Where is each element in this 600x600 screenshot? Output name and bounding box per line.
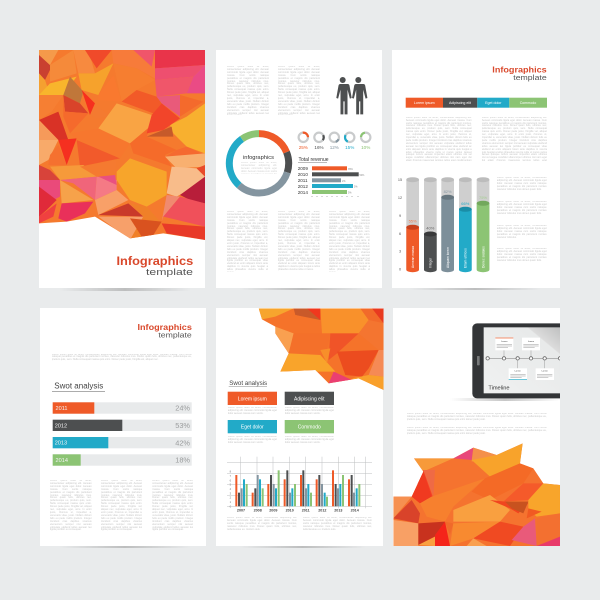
chart: grouped columns: 2014	[351, 509, 360, 513]
cover title: template	[146, 267, 193, 278]
chart: small percentage rings: 25%	[299, 145, 308, 150]
category buttons: Adipiscing elit	[294, 396, 325, 402]
chart: total revenue bars: 54%	[360, 174, 365, 177]
icon: two people	[336, 77, 367, 114]
category buttons: Commodo	[298, 425, 321, 431]
chart: cylinders: 9	[399, 214, 401, 218]
chart: grouped columns: 2	[230, 496, 232, 500]
chart: total revenue bars: 2011	[298, 178, 308, 183]
chart: total revenue bars: 2014	[298, 190, 308, 195]
chart: cylinders	[398, 177, 489, 272]
chart: grouped columns: 2009	[269, 509, 277, 513]
chart: small percentage rings: 15%	[345, 145, 354, 150]
cover title	[116, 256, 193, 278]
chart: swot progress bars: 2013	[55, 441, 67, 447]
low-poly cover artwork	[39, 50, 205, 240]
chart: small percentage rings: 16%	[314, 145, 324, 150]
chart: grouped columns: 5	[230, 483, 232, 487]
title: Infographics	[138, 323, 193, 332]
text: side notes	[497, 177, 547, 269]
chart: cylinders: 75%	[479, 195, 487, 200]
chart: grouped columns: 6	[230, 478, 232, 482]
tablet with timeline: Lorem	[501, 340, 508, 343]
chart: total revenue bars: 2012	[298, 184, 308, 189]
chart: cylinders: Aliquam lorem	[446, 247, 450, 268]
chart: total revenue bars: 2009	[298, 166, 308, 171]
chart: total revenue bars: Total revenue	[298, 157, 329, 163]
text: top columns	[227, 66, 320, 115]
text: button captions	[228, 407, 334, 445]
chart: swot progress bars: 18%	[175, 456, 190, 465]
panel: cover page	[39, 50, 205, 291]
chart: grouped columns	[227, 457, 372, 513]
chart: cylinders: 6	[399, 232, 401, 236]
heading: swot analysis: Swot analysis	[54, 382, 103, 391]
chart: swot progress bars	[53, 402, 192, 466]
segmented label bar: Eget dolor	[485, 101, 502, 105]
panel: timeline tablet page	[393, 308, 572, 547]
chart: swot progress bars: 53%	[175, 421, 190, 430]
chart: grouped columns: 1	[230, 500, 232, 504]
chart: cylinders: 0	[399, 268, 401, 272]
chart: total revenue bars	[298, 157, 365, 197]
title: template	[513, 73, 547, 82]
chart: cylinders: Donec sodales	[481, 246, 485, 268]
chart: grouped columns: 4	[230, 487, 232, 491]
chart: swot progress bars: 2012	[55, 423, 67, 429]
chart: grouped columns: 2007	[237, 509, 245, 513]
chart: total revenue bars: 2010	[298, 172, 308, 177]
chart: swot progress bars: 2011	[56, 406, 68, 412]
title	[138, 323, 193, 339]
title	[492, 65, 547, 82]
heading: swot analysis: Swot analysis	[229, 380, 267, 387]
chart: cylinders: Etiam ultrices	[464, 248, 468, 268]
chart: total revenue bars: 35%	[348, 168, 354, 171]
chart: small percentage rings: 12%	[330, 145, 339, 150]
chart: grouped columns: 3	[230, 491, 232, 495]
chart: cylinders: 55%	[409, 218, 417, 224]
chart: grouped columns: 2008	[254, 509, 262, 513]
chart: grouped columns: 2011	[302, 509, 310, 513]
title: Infographics	[492, 65, 547, 74]
text: bottom columns: Lorem ipsum dolor sit amet, consectetuer adipiscing elit. Aenean commodo ligula eget dolor. Aenean massa. Cum sociis natoque penatibus et magnis dis parturient montes, nascetur ridiculus mus. Donec quam felis, ultricies nec, pellentesque eu, pretium quis, sem. Nulla consequat massa quis enim. Donec pede justo, fringilla vel, aliquet nec, vulputate eget, arcu. In enim justo, rhoncus ut, imperdiet a, venenatis vitae, justo. Nullam dictum felis eu pede mollis pretium. Integer tincidunt cras dapibus vivamus elementum semper nisi aenean vulputate eleifend tellus aenean leo ligula porttitor eu consequat vitae eleifend ac enim aliquam lorem ante dapibus in viverra quis feugiat a tellus phasellus viverra nulla ut metus.	[278, 211, 320, 271]
chart: donut: infographics	[243, 155, 274, 161]
chart: grouped columns: 2010	[286, 509, 294, 513]
segmented label bar: Adipiscing elit	[449, 101, 471, 105]
low-poly corner artwork	[259, 308, 384, 390]
cover title: Infographics	[116, 256, 193, 268]
chart: grouped columns: 0	[230, 504, 232, 508]
chart: cylinders: 40%	[426, 226, 435, 230]
chart: total revenue bars: 5%	[354, 186, 358, 189]
chart: grouped columns: 2013	[334, 509, 342, 513]
segmented label bar: Commodo	[520, 101, 536, 105]
chart: grouped columns: 8	[230, 470, 232, 474]
text: intro columns	[406, 117, 547, 161]
chart: small percentage rings	[299, 131, 371, 150]
chart: cylinders: 15	[398, 178, 402, 182]
text: bottom columns	[227, 517, 372, 530]
text: columns: Lorem ipsum dolor sit amet, consectetuer adipiscing elit. Aenean commodo ligula eget dolor. Aenean massa. Cum sociis natoque penatibus et magnis dis parturient montes, nascetur ridiculus mus. Donec quam felis, ultricies nec, pellentesque eu, pretium quis, sem. Nulla consequat massa quis enim. Donec pede justo, fringilla vel, aliquet nec, vulputate eget, arcu. In enim justo, rhoncus ut, imperdiet a, venenatis vitae, justo. Nullam dictum felis eu pede mollis pretium. Integer tincidunt cras dapibus vivamus elementum semper nisi aenean vulputate eleifend tellus aenean leo ligula porttitor eu consequat.	[50, 480, 92, 531]
chart: cylinders: 82%	[444, 189, 452, 194]
title: template	[158, 330, 192, 339]
low-poly bottom artwork	[393, 443, 560, 547]
chart: small percentage rings: 10%	[361, 145, 370, 150]
chart: total revenue bars: 5%	[348, 192, 352, 195]
chart: cylinders: 3	[399, 250, 401, 254]
tablet with timeline: Lorem	[528, 340, 534, 343]
chart: swot progress bars: 24%	[175, 404, 190, 413]
chart: cylinders: 12	[398, 196, 402, 200]
segmented label bar: Lorem ipsum	[414, 101, 435, 105]
chart: donut	[229, 134, 289, 193]
tablet with timeline	[472, 323, 560, 398]
text: columns: Lorem ipsum dolor sit amet, consectetuer adipiscing elit. Aenean commodo ligula eget dolor. Aenean massa. Cum sociis natoque penatibus et magnis dis parturient montes, nascetur ridiculus mus. Donec quam felis, ultricies nec, pellentesque eu, pretium quis, sem. Nulla consequat massa quis enim. Donec pede justo, fringilla vel, aliquet nec, vulputate eget, arcu. In enim justo, rhoncus ut, imperdiet a, venenatis vitae, justo. Nullam dictum felis eu pede mollis pretium. Integer tincidunt cras dapibus vivamus elementum semper nisi aenean vulputate eleifend tellus aenean leo ligula porttitor eu consequat.	[152, 480, 193, 531]
category buttons: Eget dolor	[241, 425, 264, 431]
category buttons	[228, 392, 334, 433]
text: intro paragraphs	[407, 413, 547, 437]
segmented label bar	[406, 98, 547, 108]
tablet with timeline: Lorem	[542, 370, 548, 373]
text: bottom columns	[227, 211, 370, 272]
chart: grouped columns: 2012	[318, 509, 326, 513]
text: columns: Lorem ipsum dolor sit amet, consectetuer adipiscing elit. Aenean commodo ligula eget dolor. Aenean massa. Cum sociis natoque penatibus et magnis dis parturient montes, nascetur ridiculus mus. Donec quam felis, ultricies nec, pellentesque eu, pretium quis, sem. Nulla consequat massa quis enim. Donec pede justo, fringilla vel, aliquet nec, vulputate eget, arcu. In enim justo, rhoncus ut, imperdiet a, venenatis vitae, justo. Nullam dictum felis eu pede mollis pretium. Integer tincidunt cras dapibus vivamus elementum semper nisi aenean vulputate eleifend tellus aenean leo ligula porttitor eu consequat.	[101, 480, 142, 531]
chart: cylinders: Aenean massa	[411, 246, 415, 268]
panel: swot bars page	[40, 308, 206, 548]
chart: swot progress bars: 42%	[175, 438, 190, 447]
tablet with timeline: Lorem	[515, 370, 521, 373]
tablet with timeline: Timeline	[488, 385, 510, 391]
text: columns	[50, 480, 193, 531]
chart: swot progress bars: 2014	[56, 458, 68, 464]
panel: cylinder chart page	[392, 50, 560, 290]
panel: donut and revenue page	[216, 50, 382, 290]
chart: total revenue bars: 2%	[342, 180, 346, 183]
panel: column chart page	[216, 308, 384, 548]
chart: cylinders: Integer	[429, 257, 433, 268]
chart: grouped columns: 7	[230, 474, 232, 478]
category buttons: Lorem ipsum	[238, 396, 267, 402]
chart: cylinders: 66%	[461, 201, 470, 206]
